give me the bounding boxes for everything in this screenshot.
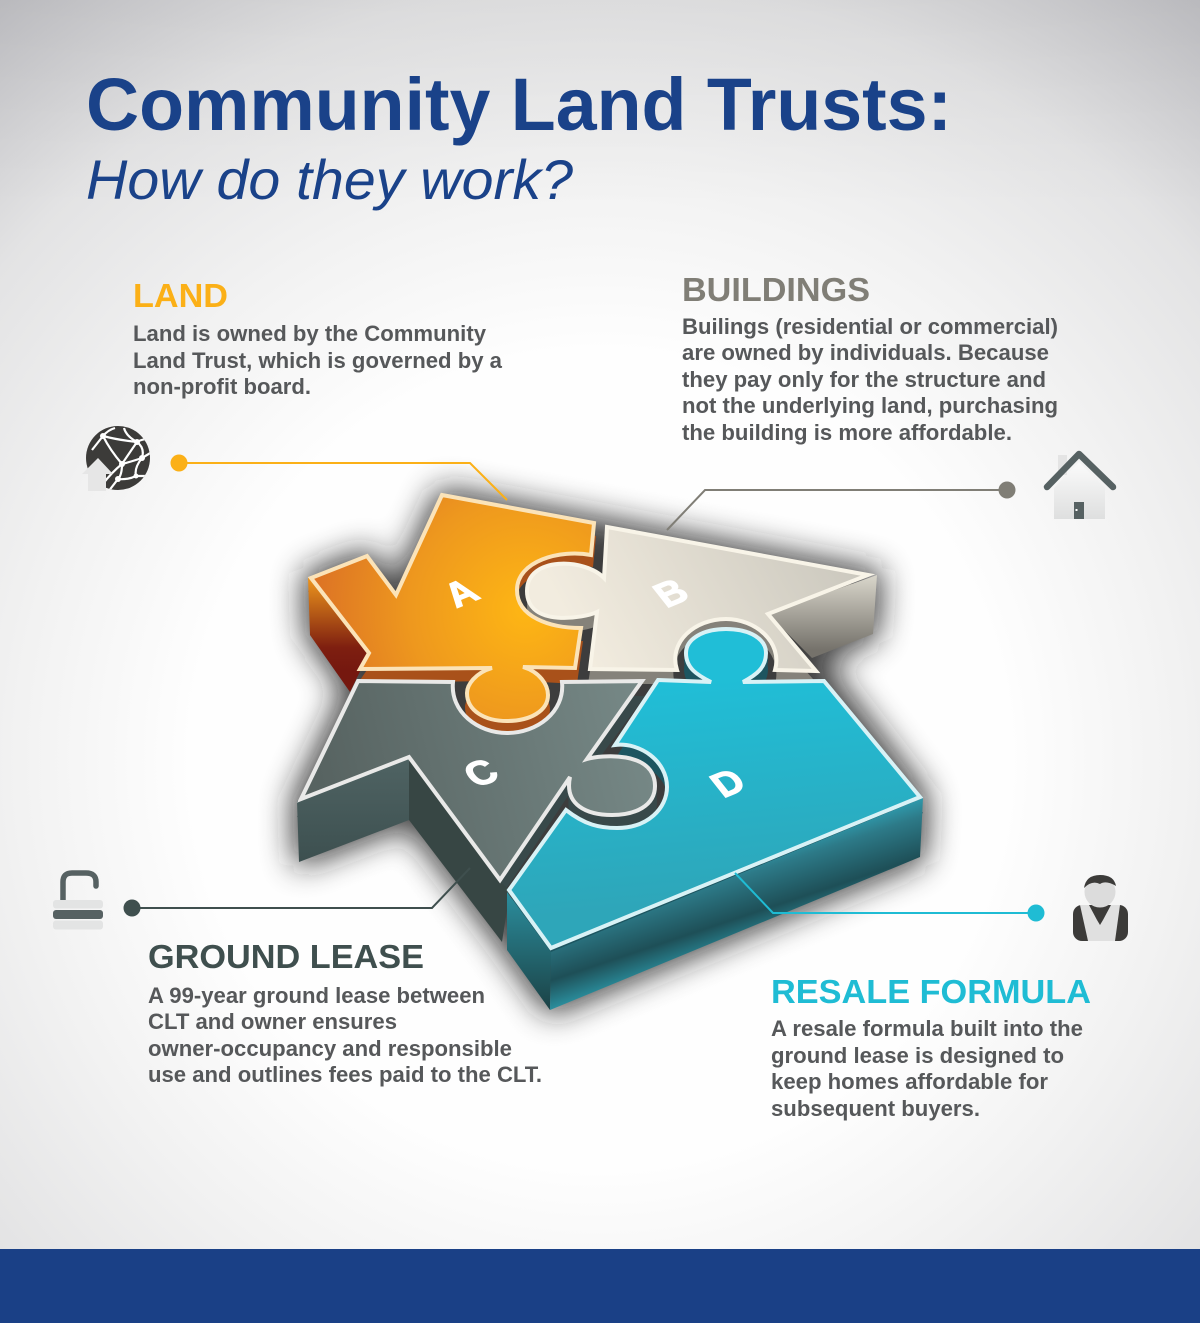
text block: ground lease <box>148 938 542 1087</box>
text block: buildings: not the underlying land, purchasing <box>682 393 1058 418</box>
piece D: resale formula <box>509 629 920 948</box>
text block: land <box>133 277 503 399</box>
footer band <box>0 1249 1200 1323</box>
piece C: ground lease <box>301 681 655 880</box>
title: How do they work? <box>86 148 573 211</box>
text block: buildings <box>682 271 1058 445</box>
leader: ground lease <box>124 868 470 916</box>
text block: resale formula: subsequent buyers. <box>771 1096 980 1121</box>
text block: buildings: are owned by individuals. Because <box>682 340 1049 365</box>
piece D: resale formula: D <box>703 762 754 805</box>
outer walls <box>297 575 923 1010</box>
text block: ground lease: A 99-year ground lease between <box>148 983 485 1008</box>
piece C: ground lease: C <box>456 752 507 795</box>
text block: ground lease: use and outlines fees paid to the CLT. <box>148 1062 542 1087</box>
leader: buildings <box>667 482 1016 530</box>
text block: resale formula: A resale formula built into the <box>771 1016 1083 1041</box>
icon: open lock <box>53 873 103 930</box>
icon: land network with house <box>82 426 152 492</box>
text block: resale formula: ground lease is designed to <box>771 1043 1064 1068</box>
text block: resale formula: RESALE FORMULA <box>771 973 1091 1010</box>
leader: land <box>170 454 507 500</box>
drop shadow <box>297 493 923 1010</box>
piece A: land: A <box>436 572 487 615</box>
icon: person in suit <box>1073 875 1128 941</box>
inner walls <box>297 507 923 966</box>
text block: resale formula <box>771 973 1091 1121</box>
text block: resale formula: keep homes affordable for <box>771 1069 1048 1094</box>
text block: ground lease: owner-occupancy and responsible <box>148 1036 512 1061</box>
text block: land: Land is owned by the Community <box>133 321 487 346</box>
text block: land: Land Trust, which is governed by a <box>133 348 503 373</box>
piece B: buildings <box>527 527 868 671</box>
title <box>86 63 952 211</box>
text block: ground lease: GROUND LEASE <box>148 938 424 975</box>
text block: buildings: they pay only for the structure and <box>682 367 1046 392</box>
icon: house <box>1047 454 1113 519</box>
text block: buildings: Builings (residential or commercial) <box>682 314 1058 339</box>
title: Community Land Trusts: <box>86 63 952 146</box>
text block: buildings: the building is more affordable. <box>682 420 1012 445</box>
text block: buildings: BUILDINGS <box>682 271 870 308</box>
text block: ground lease: CLT and owner ensures <box>148 1009 397 1034</box>
puzzle house diagram <box>297 493 923 1010</box>
piece B: buildings: B <box>646 572 697 615</box>
leader: resale formula <box>735 873 1044 922</box>
piece A: land <box>311 495 594 721</box>
text block: land: LAND <box>133 277 228 314</box>
text block: land: non-profit board. <box>133 374 311 399</box>
